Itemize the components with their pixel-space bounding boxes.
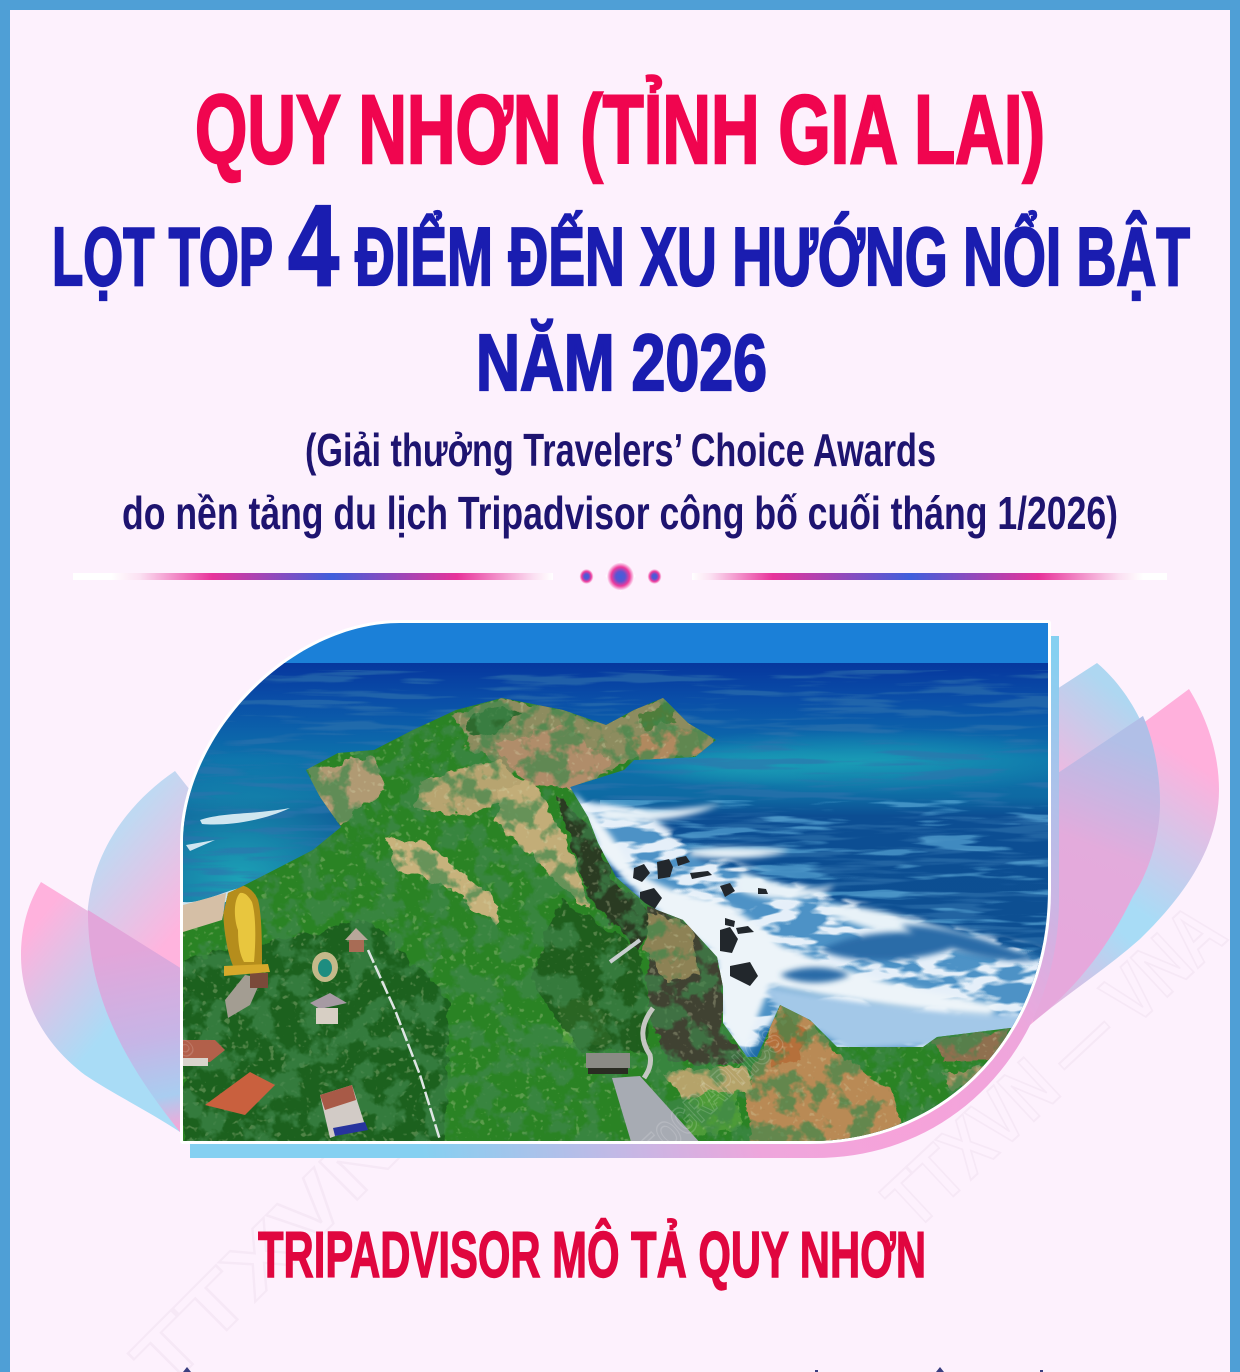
left sea whitecaps — [183, 808, 290, 915]
land base — [183, 698, 1012, 1141]
beach — [183, 893, 226, 935]
photo watermark — [183, 1026, 784, 1141]
sky — [283, 623, 1048, 664]
shallow foam — [766, 986, 1020, 1047]
title line 2: 4 — [288, 182, 339, 310]
left dark vegetation — [183, 920, 450, 1145]
lower dark rock — [645, 905, 745, 1065]
hut — [586, 1053, 630, 1068]
title line 2 — [52, 182, 1190, 310]
shrine pavilions — [183, 928, 368, 1138]
photo: Quy Nhon coastline — [180, 620, 1051, 1144]
white coast strip — [572, 790, 1000, 1050]
fence — [368, 950, 440, 1140]
photo watermark: INFOGRAPHICS — [616, 1018, 792, 1187]
surf — [572, 789, 1042, 1057]
decorative petals left — [21, 771, 190, 1138]
orange outcrop — [745, 1005, 900, 1145]
headland rock — [450, 698, 716, 787]
golden statue — [223, 885, 270, 976]
slope tan patches — [415, 760, 530, 815]
sea rocks — [633, 856, 768, 986]
wave fingers — [600, 803, 1030, 958]
subtitle — [122, 424, 1118, 539]
photo watermark: INFOGRAPHICS — [44, 1023, 202, 1175]
watermark — [115, 887, 1240, 1372]
title line 3: NĂM 2026 — [476, 318, 767, 407]
divider — [73, 560, 1167, 592]
road — [612, 1076, 702, 1145]
subtitle: (Giải thưởng Travelers’ Choice Awards — [305, 424, 936, 476]
sea — [180, 663, 1060, 1143]
decorative petals right — [1000, 663, 1219, 1025]
photo backing strip — [190, 636, 1059, 1158]
cropped next text line — [183, 1367, 1043, 1372]
title line 2: LỌT TOP — [52, 210, 273, 303]
